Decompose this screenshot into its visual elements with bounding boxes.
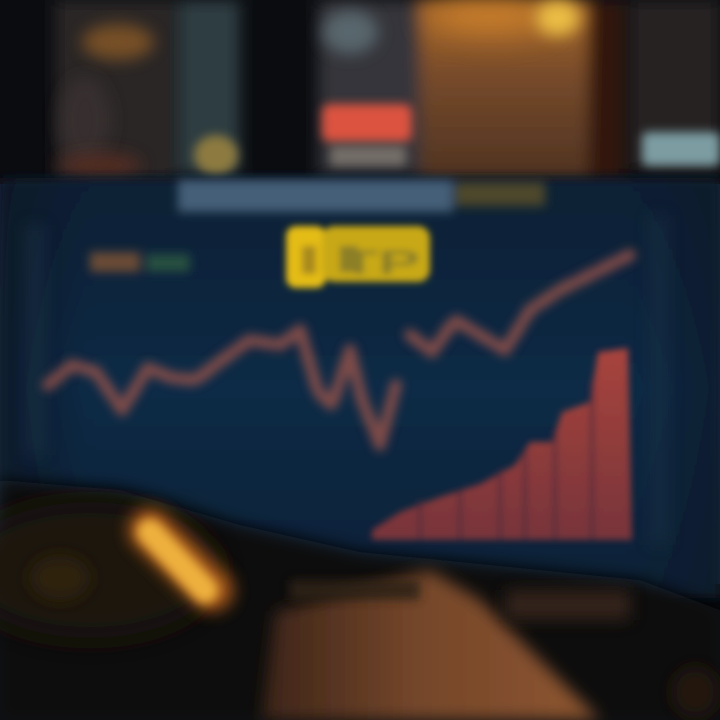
pale box at right [642,132,720,166]
yellow heading label: TP [340,244,420,282]
red sign [322,104,412,166]
bar chart [372,348,632,540]
foreground: desk shadow [0,480,720,720]
background: dark room [0,0,720,200]
screen header bar [178,180,545,212]
glowing yellow highlight [150,530,212,590]
yellow heading label [286,226,430,288]
shelf highlights [58,10,378,177]
warm ceiling lights [428,0,580,36]
small legend label [90,252,190,272]
foreground: dark object [0,502,719,718]
line chart [48,255,630,445]
panel: monitor screen [0,178,720,598]
foreground: papers on desk [262,570,630,720]
